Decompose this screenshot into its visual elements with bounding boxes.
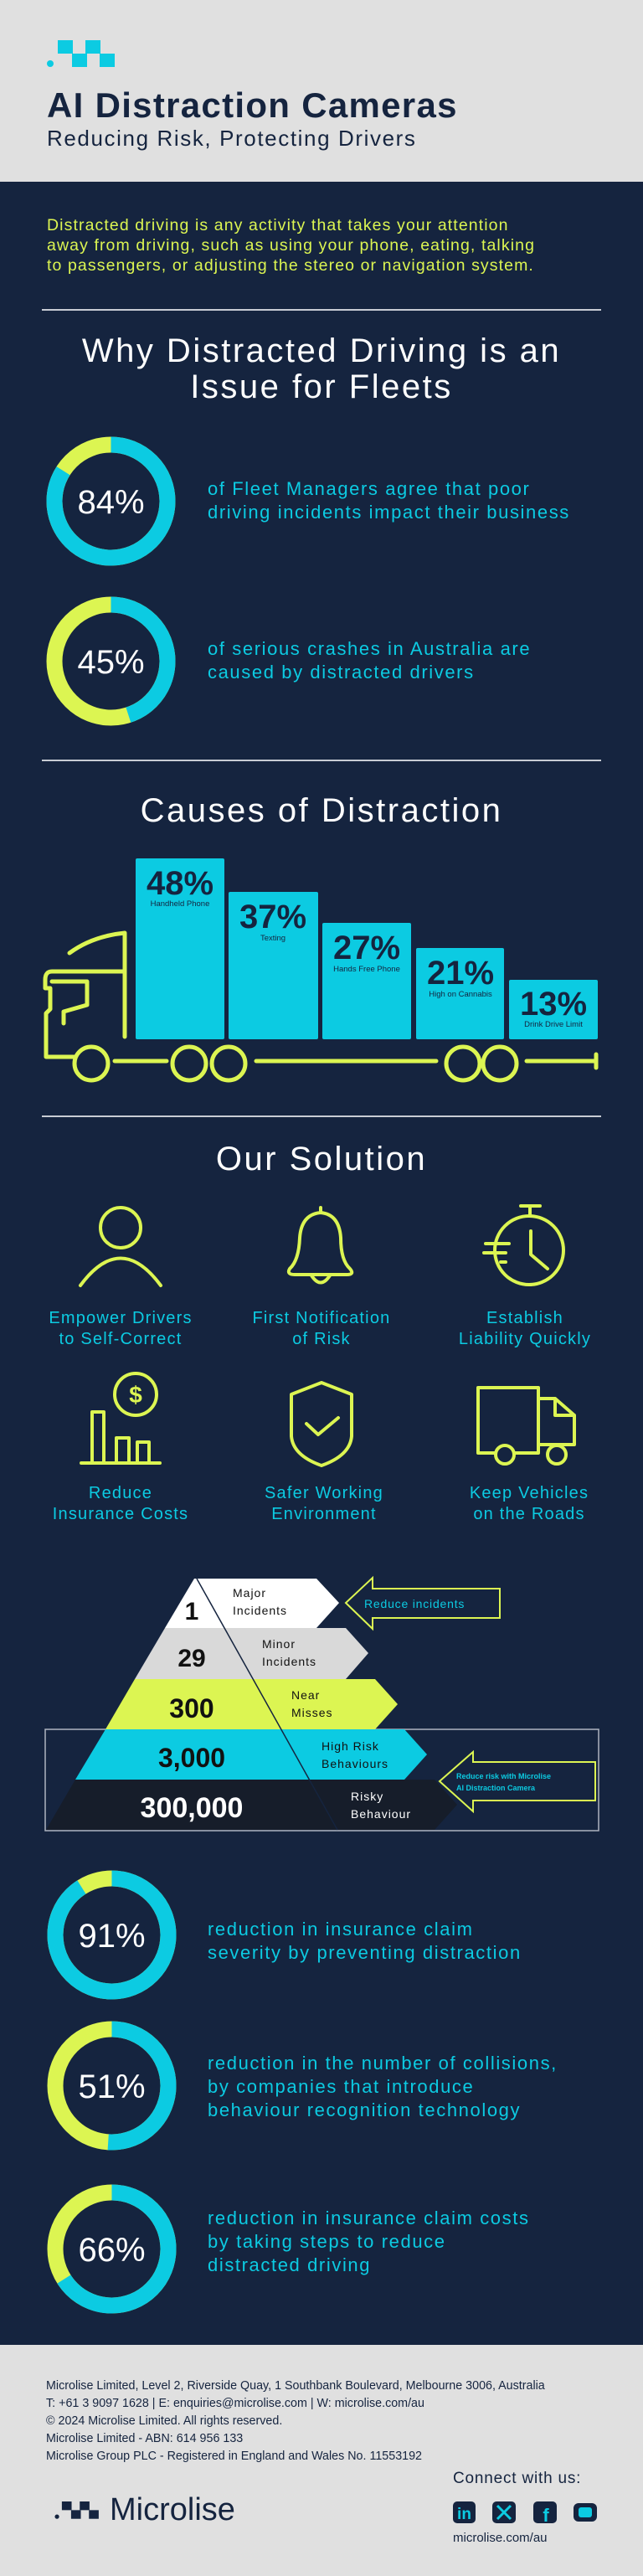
heading: causes: Causes of Distraction [141,792,502,829]
pyramid: Reduce incidents [364,1597,465,1610]
footer text [46,2379,545,2463]
text: Keep Vehicles [470,1484,589,1502]
social icons [453,2501,597,2524]
truck bar chart: 21% [427,955,494,992]
pyramid: 300,000 [141,1792,243,1824]
stat text 66 [208,2208,530,2275]
donut 84: 84% [77,484,145,521]
stat text 66: by taking steps to reduce [208,2231,446,2252]
text: Safer Working [265,1484,383,1502]
donut 45: 45% [77,644,145,681]
labels row 2 [53,1484,188,1523]
stat text 66: distracted driving [208,2254,371,2275]
stat text 45: of serious crashes in Australia are [208,638,531,659]
donut 66: 66% [78,2232,146,2269]
stat text 91 [208,1919,522,1963]
donut 91: 91% [78,1918,146,1955]
intro text [47,216,535,275]
truck bar chart: 13% [520,986,587,1023]
intro text: to passengers, or adjusting the stereo or navigation system. [47,256,534,275]
footer [0,2345,643,2576]
truck bar chart [44,858,598,1082]
footer logo: Microlise [110,2492,235,2527]
labels row 1: to Self-Correct [59,1330,182,1348]
heading: solution: Our Solution [216,1141,427,1177]
pyramid: 1 [185,1598,198,1625]
labels row 2: Insurance Costs [53,1505,188,1523]
truck bar chart: 48% [147,865,213,902]
labels row 1 [49,1309,193,1348]
donut 91 [47,1871,176,2000]
subtitle: Reducing Risk, Protecting Drivers [47,126,417,151]
pyramid: High Risk [322,1739,379,1753]
pyramid: Behaviours [322,1757,388,1770]
stat text 45 [208,638,531,683]
stat text 84 [208,478,570,523]
stat text 51: reduction in the number of collisions, [208,2053,558,2074]
truck bar chart: High on Cannabis [429,990,492,999]
stat text 51: behaviour recognition technology [208,2099,521,2120]
pyramid: Reduce risk with Microlise [456,1772,551,1780]
stat text 51: by companies that introduce [208,2076,474,2097]
footer text: Microlise Limited, Level 2, Riverside Quay, 1 Southbank Boulevard, Melbourne 3006, Australia [46,2379,545,2393]
stat text 84: driving incidents impact their business [208,502,570,523]
pyramid: AI Distraction Camera [456,1784,536,1792]
text: Environment [271,1505,377,1523]
pyramid: Misses [291,1706,333,1719]
donut 51: 51% [78,2069,146,2105]
truck bar chart: Drink Drive Limit [524,1020,583,1029]
stat text 84: of Fleet Managers agree that poor [208,478,530,499]
text: of Risk [292,1330,351,1348]
pyramid: 29 [177,1645,206,1672]
pyramid: 3,000 [158,1743,225,1773]
labels row 1: Empower Drivers [49,1309,193,1327]
footer logo [54,2492,235,2527]
pyramid: Behaviour [351,1807,411,1821]
pyramid: Incidents [262,1655,316,1668]
connect: Connect with us: [453,2470,581,2487]
stat text 91: reduction in insurance claim [208,1919,474,1940]
labels row 2: Reduce [89,1484,152,1502]
truck bar chart: 37% [239,899,306,935]
pyramid: Risky [351,1790,383,1803]
pyramid: Near [291,1688,320,1702]
stat text 51 [208,2053,558,2120]
donut 51 [47,2022,176,2151]
pyramid: Minor [262,1637,296,1651]
intro text: Distracted driving is any activity that takes your attention [47,216,509,234]
truck bar chart: Texting [260,934,285,943]
footer text: Microlise Limited - ABN: 614 956 133 [46,2432,243,2445]
footer text: Microlise Group PLC - Registered in England and Wales No. 11553192 [46,2450,422,2463]
website: microlise.com/au [453,2531,548,2545]
solution icons: $ [129,1382,142,1408]
text: Liability Quickly [459,1330,591,1348]
logo mark [47,40,115,67]
text: First Notification [253,1309,390,1327]
heading: why [82,332,561,405]
title: AI Distraction Cameras [47,85,458,125]
donut 84 [47,437,176,566]
text: on the Roads [473,1505,585,1523]
pyramid: 300 [169,1693,214,1723]
header panel [0,0,643,182]
truck bar chart: 27% [333,930,400,966]
solution icons [79,1204,576,1467]
social icons: in [457,2506,471,2523]
truck bar chart: Handheld Phone [151,899,209,909]
stat text 66: reduction in insurance claim costs [208,2208,530,2228]
text: Establish [486,1309,563,1327]
donut 45 [47,596,176,725]
stat text 91: severity by preventing distraction [208,1942,522,1963]
heading: why: Why Distracted Driving is an [82,332,561,369]
footer text: T: +61 3 9097 1628 | E: enquiries@microlise.com | W: microlise.com/au [46,2397,424,2410]
donut 66 [47,2184,176,2313]
pyramid: Major [233,1586,266,1600]
pyramid: Incidents [233,1604,287,1617]
truck bar chart: Hands Free Phone [333,965,400,974]
heading: why: Issue for Fleets [190,368,453,405]
intro text: away from driving, such as using your phone, eating, talking [47,236,535,255]
stat text 45: caused by distracted drivers [208,662,475,683]
footer text: © 2024 Microlise Limited. All rights reserved. [46,2414,282,2428]
pyramid [44,1576,599,1832]
